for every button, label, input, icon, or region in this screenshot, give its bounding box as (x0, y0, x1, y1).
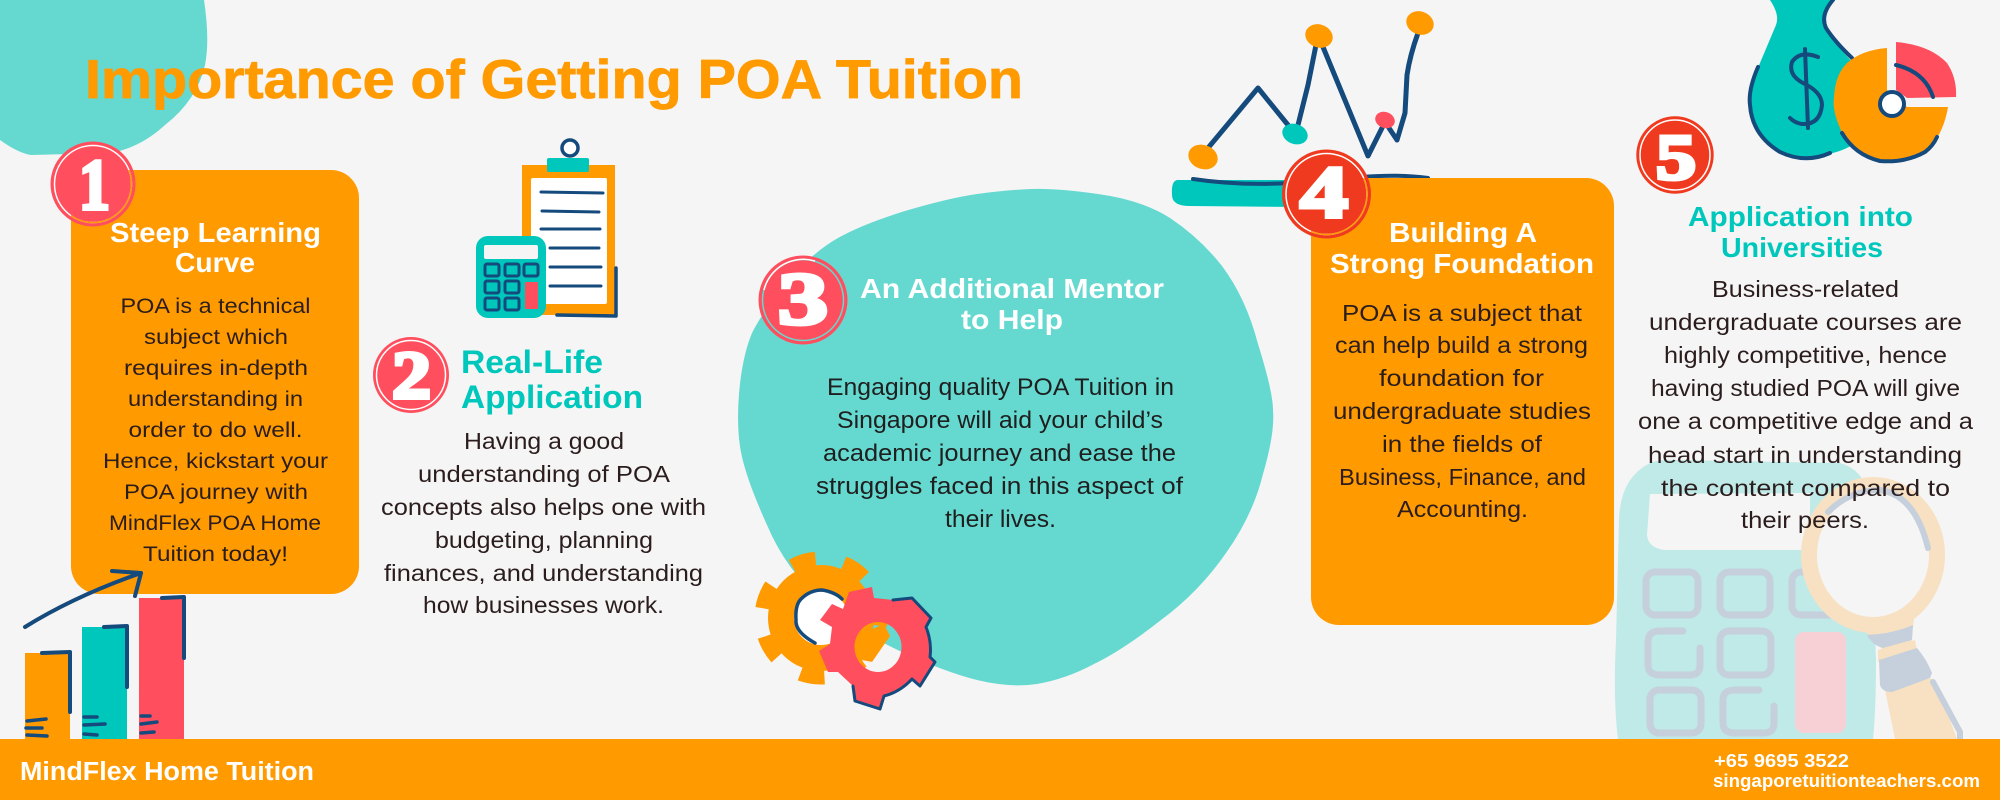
icon: money bag and pie chart (1750, 0, 1956, 161)
heading: an additional mentor to help: to Help (961, 304, 1063, 335)
heading: an additional mentor to help (860, 273, 1164, 335)
badge: number 1: 1 (79, 145, 110, 225)
text: card 4 body: foundation for (1379, 365, 1544, 391)
icon: rising bar chart (25, 597, 184, 739)
text: card 1 body: POA is a technical (120, 295, 310, 318)
badge: number 3: 3 (778, 259, 828, 341)
badge: number 5 (1636, 116, 1714, 194)
text: real-life application body: finances, and understanding (384, 560, 703, 586)
text: mentor body: Singapore will aid your child’s (837, 407, 1163, 434)
badge: number 2 (373, 337, 449, 413)
text: universities body: Business-related (1712, 276, 1899, 302)
text: card 1 body: Hence, kickstart your (103, 450, 328, 473)
text: universities body: undergraduate courses are (1649, 309, 1962, 335)
heading: steep learning curve (110, 217, 321, 278)
text: real-life application body (381, 428, 706, 618)
text: mentor body: academic journey and ease the (823, 440, 1176, 467)
heading: building a strong foundation: Building A (1389, 217, 1537, 248)
footer contact: singaporetuitionteachers.com (1713, 770, 1980, 791)
badge: number 5: 5 (1656, 122, 1696, 194)
heading: steep learning curve: Curve (175, 247, 255, 278)
heading: an additional mentor to help: An Additional Mentor (860, 273, 1164, 304)
heading: real-life application: Real-Life (461, 344, 603, 380)
heading: application into universities: Application into (1688, 201, 1913, 232)
badge: number 2: 2 (392, 337, 431, 413)
footer contact (1713, 750, 1980, 791)
badge: number 4: 4 (1300, 152, 1348, 234)
text: universities body: their peers. (1741, 507, 1869, 533)
heading: building a strong foundation: Strong Foundation (1330, 248, 1594, 279)
heading: steep learning curve: Steep Learning (110, 217, 321, 248)
icon: faded magnifying glass (1809, 485, 1960, 739)
text: universities body: having studied POA will give (1651, 375, 1960, 401)
heading: real-life application (461, 344, 643, 415)
text: universities body: highly competitive, hence (1664, 342, 1947, 368)
text: card 4 body: undergraduate studies (1333, 398, 1591, 424)
text: card 1 body: requires in-depth (124, 357, 308, 380)
text: mentor body (816, 374, 1183, 533)
text: card 4 body: can help build a strong (1335, 332, 1588, 358)
text: card 1 body: subject which (144, 326, 288, 349)
icon: clipboard and calculator (476, 140, 616, 318)
text: real-life application body: how businesses work. (423, 592, 664, 618)
text: real-life application body: understanding of POA (418, 461, 671, 487)
text: card 1 body: Tuition today! (143, 543, 288, 566)
heading: application into universities (1688, 201, 1913, 263)
text: card 1 body: POA journey with (124, 481, 308, 504)
text: real-life application body: concepts also helps one with (381, 494, 706, 520)
panel: 1 steep learning curve card (71, 170, 359, 594)
panel: 3 mentor blob (738, 189, 1273, 685)
text: card 4 body (1333, 300, 1591, 522)
title: Importance of Getting POA Tuition (85, 48, 1023, 110)
text: mentor body: struggles faced in this aspect of (816, 473, 1183, 500)
text: card 4 body: POA is a subject that (1342, 300, 1583, 326)
badge: number 4 (1282, 150, 1371, 238)
text: universities body: one a competitive edge and a (1638, 408, 1973, 434)
footer bar (0, 739, 2000, 800)
icon: line chart on bar (1172, 7, 1437, 207)
text: mentor body: Engaging quality POA Tuition in (827, 374, 1174, 401)
badge: number 3 (758, 256, 848, 344)
text: universities body (1638, 276, 1973, 533)
arrow: growth arrow (25, 571, 141, 627)
heading: application into universities: Universities (1721, 232, 1883, 263)
text: card 4 body: Accounting. (1397, 496, 1528, 522)
text: universities body: head start in understanding (1648, 442, 1962, 468)
text: card 1 body: MindFlex POA Home (109, 512, 321, 535)
text: card 4 body: in the fields of (1382, 431, 1543, 457)
text: universities body: the content compared to (1661, 475, 1950, 501)
footer brand: MindFlex Home Tuition (20, 758, 314, 786)
text: card 1 body: order to do well. (128, 419, 302, 442)
icon: faded calculator (1615, 460, 1876, 739)
heading: real-life application: Application (461, 379, 643, 415)
icon: gears (742, 539, 935, 709)
footer contact: +65 9695 3522 (1714, 750, 1849, 771)
badge: number 1 (50, 142, 136, 226)
text: card 4 body: Business, Finance, and (1339, 464, 1586, 490)
panel: 4 building a strong foundation card (1311, 178, 1614, 625)
decorative blob: top left (0, 0, 207, 155)
text: real-life application body: budgeting, planning (435, 527, 653, 553)
text: real-life application body: Having a good (464, 428, 624, 454)
text: mentor body: their lives. (945, 506, 1056, 533)
text: card 1 body (103, 295, 328, 566)
text: card 1 body: understanding in (128, 388, 303, 411)
heading: building a strong foundation (1330, 217, 1594, 279)
